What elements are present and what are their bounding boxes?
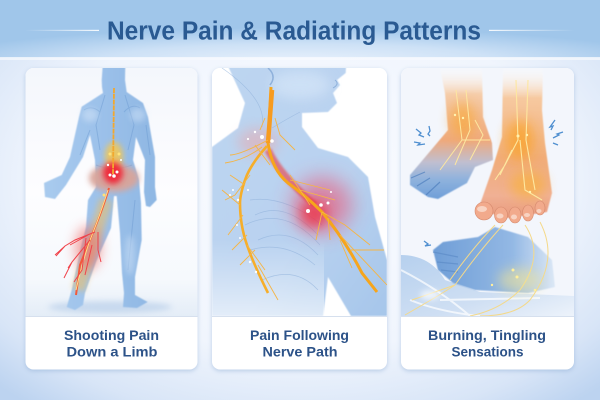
left upper foot — [410, 68, 493, 199]
panel: pain following nerve path — [212, 66, 387, 370]
caption: Nerve Path — [262, 344, 338, 360]
illustration: neck and shoulder with nerve path — [212, 66, 387, 316]
caption: Sensations — [452, 344, 524, 360]
panel: shooting pain down a limb — [26, 66, 198, 370]
caption: Shooting Pain — [64, 327, 159, 343]
illustration: back view of man with leg nerve pain — [26, 66, 198, 316]
header band — [0, 0, 600, 60]
blanket — [401, 255, 575, 316]
caption — [26, 316, 198, 360]
caption — [401, 316, 574, 360]
lower foot — [405, 222, 555, 316]
caption: Down a Limb — [66, 344, 158, 360]
icons: tingling sparks — [414, 120, 563, 246]
title: Nerve Pain & Radiating Patterns — [107, 18, 481, 46]
caption — [212, 316, 387, 360]
panel: burning, tingling sensations — [401, 68, 575, 370]
illustration: feet with burning nerves — [401, 68, 575, 316]
caption: Pain Following — [250, 327, 349, 343]
caption: Burning, Tingling — [428, 327, 546, 343]
right upper foot — [454, 68, 552, 223]
